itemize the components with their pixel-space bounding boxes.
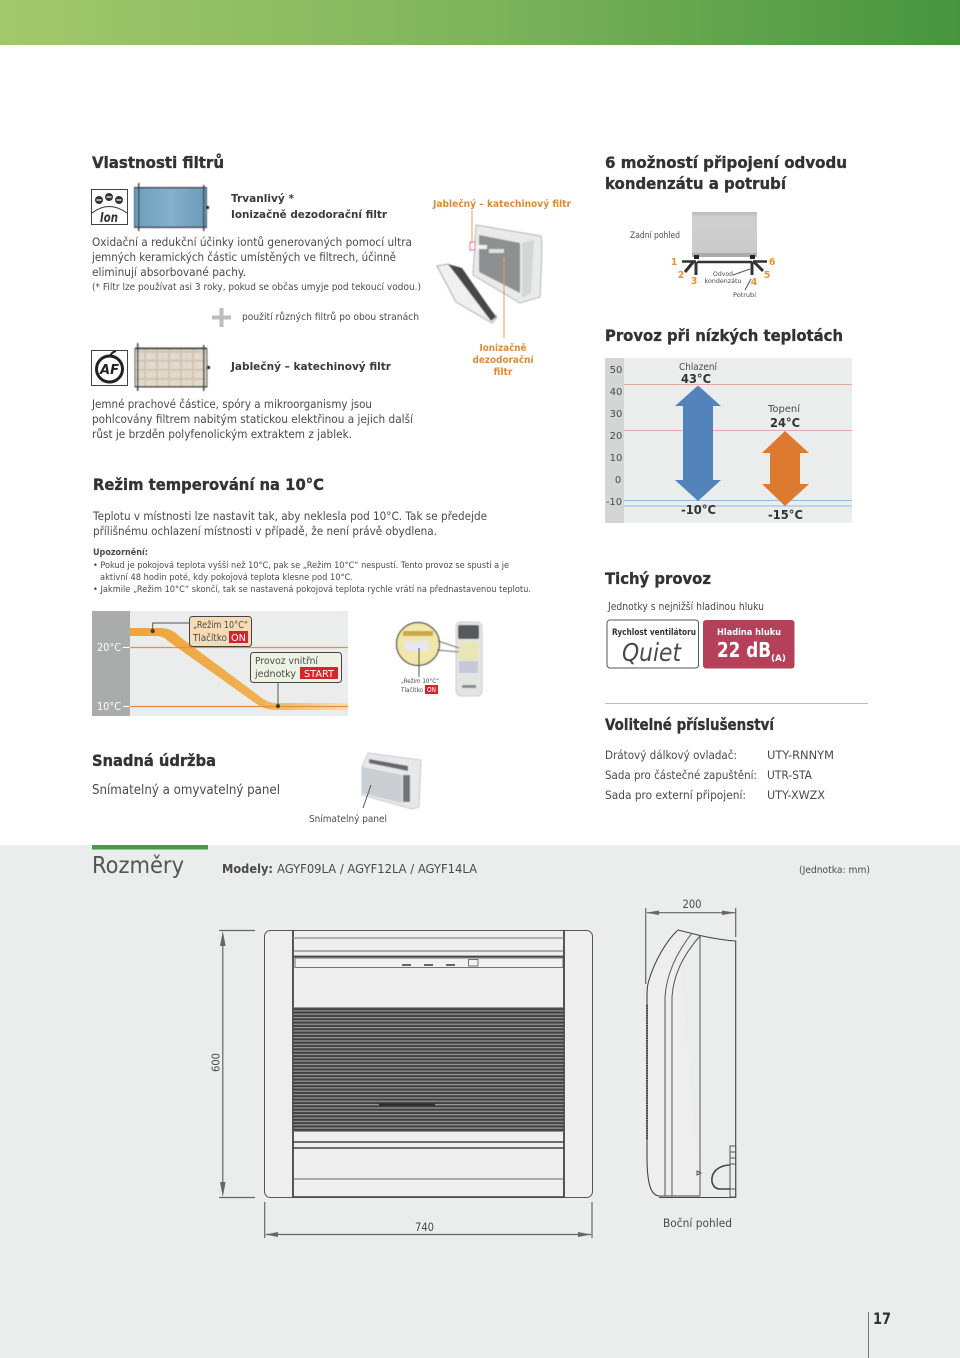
badge: noise level [703,620,794,668]
diagram: rear view: kondenzátu [704,277,742,285]
callout: mode button on: „Režim 10°C“ [193,620,248,631]
image: apple catechin filter [135,343,210,391]
text: notice: • Jakmile „Režim 10°C“ skončí, tak se nastavená pokojová teplota rychle vrátí na přednastavenou teplotu. [93,584,531,595]
text: notice: Upozornění: [93,547,148,558]
diagram: rear view: 6 [769,257,776,268]
text: mode description: Teplotu v místnosti lze nastavit tak, aby neklesla pod 10°C. Tak se předejde [92,509,487,523]
icon: plus [212,308,231,327]
label: side view: Boční pohled [663,1216,732,1230]
chart: operating range: -15°C [768,508,803,522]
leader line [363,785,371,808]
dimension: width 740: 740 [415,1220,434,1234]
subheading: apple catechin filter: Jablečný – katechinový filtr [230,360,392,373]
text: notice: aktivní 48 hodin poté, kdy pokojová teplota klesne pod 10°C. [100,572,353,583]
dimension: height 600 [210,930,255,1198]
text: models: AGYF09LA / AGYF12LA / AGYF14LA [277,861,477,876]
subheading: ion filter [231,192,388,221]
heading: dimensions: Rozměry [92,853,184,879]
leader lines [472,210,504,338]
panel: low temperature operation [605,326,852,523]
callout: unit start: START [304,669,334,680]
heading: filter properties: Vlastnosti filtrů [92,153,224,172]
diagram: rear view: 3 [691,276,697,287]
chart: operating range: 50 [610,365,622,376]
title accent [92,845,208,850]
label: apple filter: Jablečný – katechinový filtr [432,198,571,210]
diagram: rear view: 1 [671,257,677,268]
text: lowest noise: Jednotky s nejnižší hladinou hluku [607,601,764,613]
dimension: depth 200 [646,897,736,984]
heading: quiet operation: Tichý provoz [605,569,711,588]
text: apple catechin description [91,397,414,441]
heading: connection options [605,153,847,193]
callout: mode button on: Tlačítko [192,633,227,644]
panel: quiet operation [605,569,794,668]
badge: fan speed quiet: Quiet [622,638,682,667]
heading: easy maintenance: Snadná údržba [92,751,216,770]
label: ionizing filter [472,342,534,378]
text: ion filter description: eliminují absorbované pachy. [92,265,246,279]
text: unit: (Jednotka: mm) [799,865,870,876]
chart: operating range: 43°C [681,372,711,386]
chart: operating range: 0 [615,475,621,486]
text: ion filter description [91,235,421,293]
image: remote controller: „Režim 10°C“ [401,677,439,685]
text: ion filter description: Oxidační a redukční účinky iontů generovaných pomocí ultra [92,235,412,249]
chart: operating range: Topení [767,403,801,415]
icon: ion [92,190,128,226]
text: both sides: použití různých filtrů po obou stranách [242,311,419,323]
list: accessories: UTR-STA [767,768,812,782]
text: apple catechin description: Jemné prachové částice, spóry a mikroorganismy jsou [91,397,372,411]
text: apple catechin description: růst je brzděn polyfenolickým extraktem z jablek. [92,427,352,441]
icon: apple AF: AF [99,363,119,378]
label: rear view: Zadní pohled [630,231,680,241]
heading: connection options: 6 možností připojení odvodu [605,153,847,172]
chart: operating range: 20 [610,431,622,442]
label: ionizing filter: dezodorační [472,354,534,366]
subheading: ion filter: Trvanlivý * [231,192,294,205]
chart: temperature timeline [92,611,348,716]
badge: fan speed quiet [607,620,698,668]
figure: unit with filters [432,198,571,378]
text: models: Modely: [222,861,273,876]
heading: 10 degree mode: Režim temperování na 10°C [93,475,324,494]
chart: operating range: -10 [606,497,622,508]
diagram: rear view: 4 [751,277,758,288]
list: accessories: UTY-RNNYM [767,748,834,762]
list: accessories [605,748,834,802]
chart: operating range: Chlazení [679,361,718,373]
list: accessories: Sada pro částečné zapuštění: [605,768,757,782]
callout: unit start [250,652,342,682]
badge: noise level: (A) [771,654,786,664]
diagram: rear view: Odvod [713,270,733,278]
list: accessories: UTY-XWZX [767,788,825,802]
heading: accessories: Volitelné příslušenství [605,715,775,734]
callout: mode button on [190,616,252,646]
chart: operating range: 10 [610,453,622,464]
chart: operating range: 40 [610,387,622,398]
panel: easy maintenance [92,751,421,825]
text: notice [93,547,531,595]
callout: mode button on: ON [231,633,246,644]
panel: dimensions [0,845,960,1358]
image: ion filter [134,183,209,231]
text: removable panel: Snímatelný a omyvatelný panel [92,783,280,798]
text: notice: • Pokud je pokojová teplota vyšší než 10°C, pak se „Režim 10°C“ nespustí. Tento provoz se spustí a je [93,560,509,571]
heading: connection options: kondenzátu a potrubí [605,174,787,193]
chart: operating range: 30 [610,409,622,420]
panel: frost protection mode [92,475,531,716]
diagram: rear view: 5 [764,270,770,281]
arrow: cooling range [675,386,721,501]
text: ion filter description: jemných keramických částic umístěných ve filtrech, účinně [91,250,396,264]
label: removable panel: Snímatelný panel [309,813,387,825]
image: opened unit [437,225,542,323]
chart: operating range: 24°C [770,416,800,430]
heading: low temperature: Provoz při nízkých teplotách [605,326,843,345]
arrow: heating range [762,431,809,506]
text: ion filter description: (* Filtr lze používat asi 3 roky, pokud se občas umyje pod tekoucí vodou.) [92,282,421,293]
drawing: side view [647,930,736,1198]
dimension: depth 200: 200 [682,897,702,911]
dimension: width 740 [265,1202,592,1238]
list: accessories: Sada pro externí připojení: [605,788,746,802]
callout: unit start: jednotky [254,669,296,680]
subheading: ion filter: Ionizačně dezodorační filtr [231,208,388,221]
diagram: rear view [671,212,776,299]
page number [868,1309,891,1358]
chart: temperature timeline: 10°C [97,701,121,713]
icon: ion: Ion [100,211,118,226]
text: mode description: přílišnému ochlazení místnosti v případě, že není právě obydlena. [93,524,437,538]
panel: filter properties [91,153,421,441]
panel: optional accessories [605,715,834,802]
callout: unit start: Provoz vnitřní [255,655,319,667]
chart: temperature timeline: 20°C [97,642,121,654]
badge: noise level: Hladina hluku [717,628,781,638]
badge: fan speed quiet: Rychlost ventilátoru [612,628,696,638]
panel: condensate connection [605,153,847,299]
image: unit with panel [362,753,421,809]
label: ionizing filter: Ionizačně [480,342,527,354]
chart: operating range [605,358,852,523]
dimension: height 600: 600 [210,1053,222,1072]
list: accessories: Drátový dálkový ovladač: [605,748,737,762]
page number: 17 [873,1309,891,1328]
top green banner [0,0,960,45]
chart: operating range: -10°C [681,503,716,517]
image: remote controller [396,622,482,696]
diagram: rear view: Potrubí [733,291,756,299]
image: remote controller: Tlačítko [400,686,423,694]
badge: noise level: 22 dB [717,638,771,662]
drawing: front view [264,930,592,1198]
text: apple catechin description: pohlcovány filtrem nabitým statickou elektřinou a jejich další [92,412,414,426]
icon: apple AF [92,350,128,386]
text: mode description [92,509,487,538]
diagram: rear view: 2 [678,270,684,281]
label: ionizing filter: filtr [494,367,513,378]
image: remote controller: ON [427,686,436,694]
